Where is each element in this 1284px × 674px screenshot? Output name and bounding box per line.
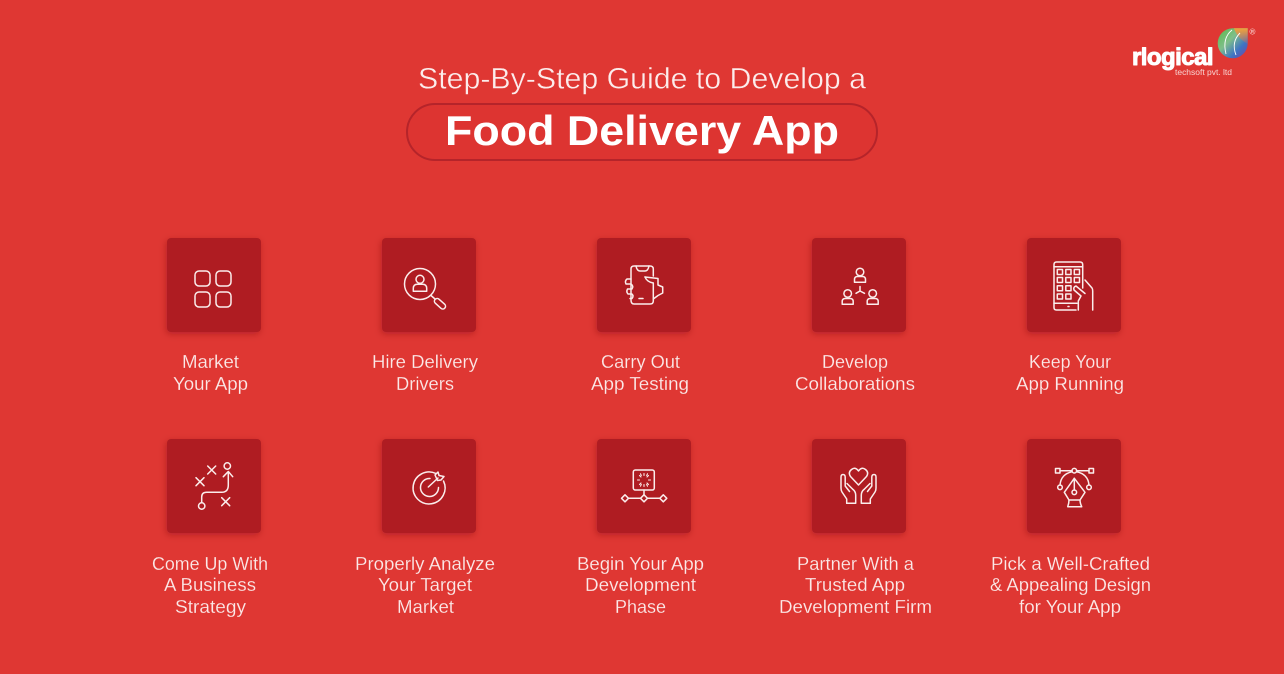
label	[152, 553, 268, 617]
label: App Testing	[591, 373, 689, 394]
step: Pick a Well-Crafted & Appealing Design for Your App	[990, 439, 1151, 617]
step: Market Your App	[167, 238, 261, 394]
icon: development process	[622, 470, 667, 502]
logo wordmark: rlogical	[1132, 44, 1214, 71]
label: Hire Delivery	[372, 351, 479, 372]
tile	[812, 238, 906, 332]
icon: target with dart	[413, 472, 445, 504]
label	[173, 351, 248, 394]
icon: magnifier with person	[404, 268, 447, 310]
icon: hand tapping phone	[1054, 262, 1093, 310]
label: Develop	[822, 351, 888, 372]
label: Carry Out	[601, 351, 680, 372]
label: A Business	[164, 574, 256, 595]
icon: hand holding phone	[625, 266, 663, 304]
title emphasis: Food Delivery App	[445, 107, 839, 154]
label: Properly Analyze	[355, 553, 495, 574]
label	[372, 351, 479, 394]
step: Develop Collaborations	[795, 238, 915, 394]
step: Begin Your App Development Phase	[577, 439, 704, 617]
label: Pick a Well-Crafted	[991, 553, 1150, 574]
tile	[1027, 238, 1121, 332]
step: Properly Analyze Your Target Market	[355, 439, 495, 617]
label	[779, 553, 932, 617]
logo tagline: techsoft pvt. ltd	[1175, 67, 1232, 77]
label: Drivers	[396, 373, 454, 394]
label	[577, 553, 704, 617]
icon: strategy play	[196, 463, 233, 509]
icon: app grid	[195, 271, 231, 307]
label	[795, 351, 915, 394]
step: Hire Delivery Drivers	[372, 238, 479, 394]
tile	[382, 238, 476, 332]
label: Collaborations	[795, 373, 915, 394]
logo mark: leaf	[1218, 28, 1248, 58]
step: Carry Out App Testing	[591, 238, 691, 394]
icon: hands holding heart	[841, 468, 876, 503]
label: Your App	[173, 373, 248, 394]
label: App Running	[1016, 373, 1124, 394]
title line: Step-By-Step Guide to Develop a	[418, 62, 867, 96]
icon: connected people	[842, 268, 878, 304]
label	[355, 553, 495, 617]
step: Come Up With A Business Strategy	[152, 439, 268, 617]
icon: pen tool	[1056, 468, 1094, 507]
step: Partner With a Trusted App Development Firm	[779, 439, 932, 617]
title pill	[407, 104, 877, 160]
label: Strategy	[175, 596, 247, 617]
label: Market	[397, 596, 454, 617]
tile	[167, 439, 261, 533]
label: Come Up With	[152, 553, 268, 574]
registered mark: ®	[1250, 28, 1256, 36]
tile	[597, 439, 691, 533]
label	[591, 351, 689, 394]
label: Keep Your	[1029, 351, 1111, 372]
label	[990, 553, 1151, 617]
label: Begin Your App	[577, 553, 704, 574]
label: Your Target	[378, 574, 472, 595]
label: Trusted App	[805, 574, 905, 595]
step: Keep Your App Running	[1016, 238, 1124, 394]
label: Phase	[615, 596, 666, 617]
label: Market	[182, 351, 239, 372]
label: for Your App	[1019, 596, 1121, 617]
tile	[167, 238, 261, 332]
logo	[1132, 28, 1256, 77]
tile	[1027, 439, 1121, 533]
label: Development	[585, 574, 696, 595]
label: Partner With a	[797, 553, 915, 574]
tile	[382, 439, 476, 533]
tile	[812, 439, 906, 533]
label	[1016, 351, 1124, 394]
label: Development Firm	[779, 596, 932, 617]
tile	[597, 238, 691, 332]
label: & Appealing Design	[990, 574, 1151, 595]
